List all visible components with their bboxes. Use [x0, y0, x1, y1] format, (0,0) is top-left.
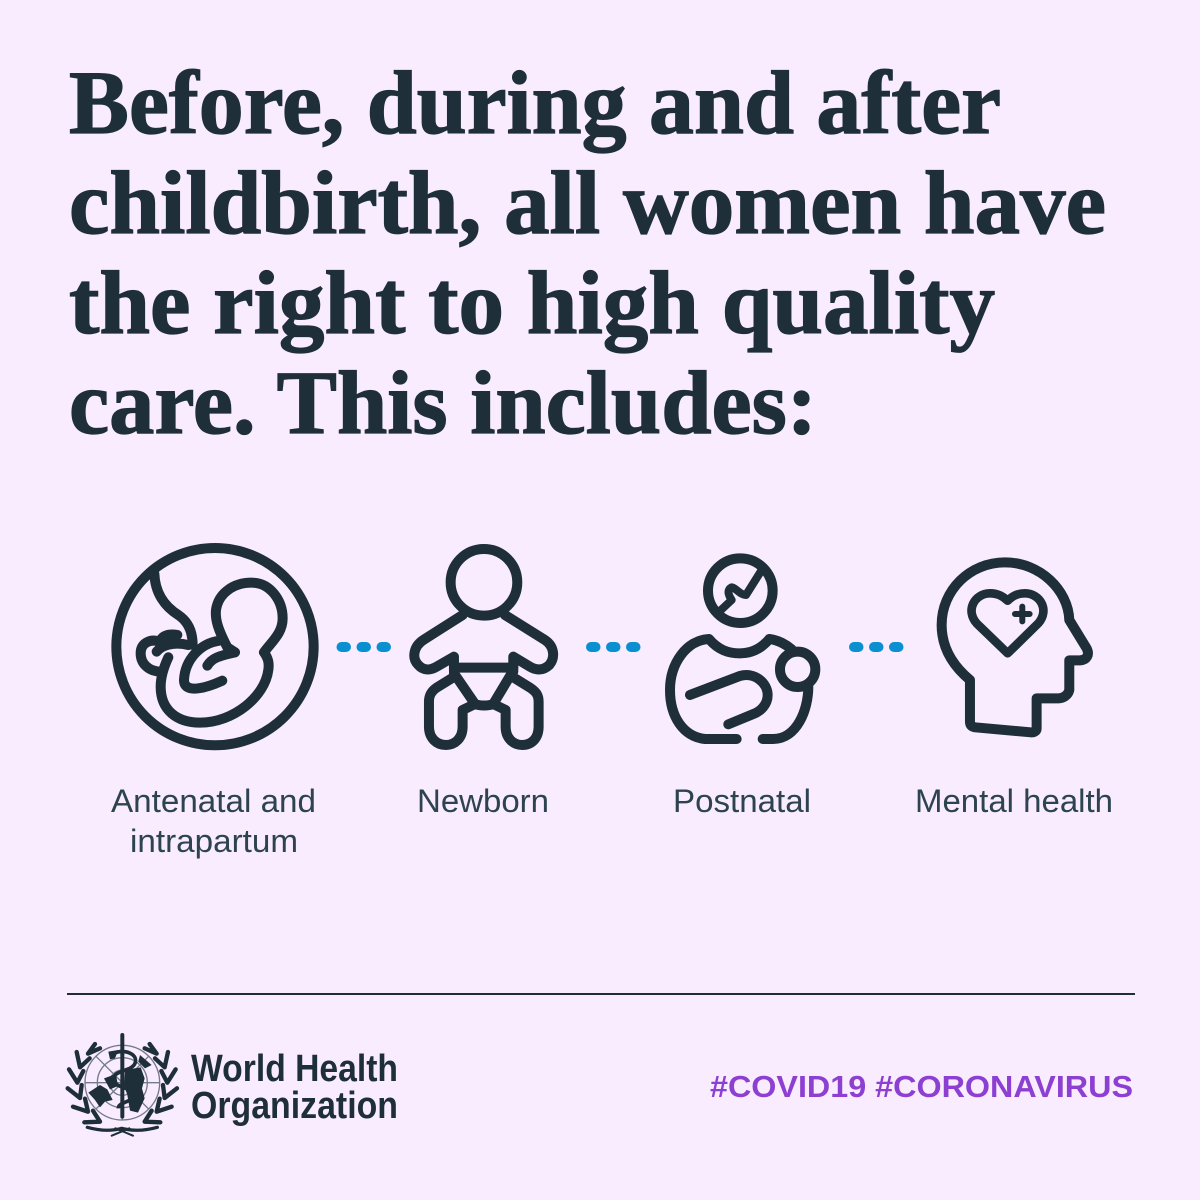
- title: care. This includes:: [69, 354, 817, 453]
- label: antenatal and intrapartum: intrapartum: [130, 823, 298, 859]
- label: antenatal and intrapartum: Antenatal and: [111, 783, 316, 819]
- title: Before, during and after: [69, 54, 1001, 153]
- title: childbirth, all women have: [69, 154, 1106, 253]
- icon: newborn baby: [414, 549, 553, 745]
- label: antenatal and intrapartum: [111, 783, 316, 859]
- connector dots 1: [336, 642, 391, 652]
- label: newborn: Newborn: [417, 783, 549, 819]
- title: [69, 54, 1106, 453]
- WHO wordmark: World Health: [191, 1048, 398, 1090]
- icon: head with heart: [942, 562, 1088, 732]
- connector dots 3: [849, 642, 904, 652]
- WHO wordmark: Organization: [191, 1085, 398, 1127]
- title: the right to high quality: [69, 254, 995, 353]
- label: postnatal: Postnatal: [673, 783, 811, 819]
- WHO wordmark: [191, 1048, 398, 1127]
- hashtags: #COVID19 #CORONAVIRUS: [710, 1069, 1133, 1104]
- icon: mother breastfeeding: [670, 558, 815, 739]
- connector dots 2: [586, 642, 640, 652]
- icon: fetus in womb: [116, 548, 314, 745]
- label: mental health: Mental health: [915, 783, 1113, 819]
- WHO emblem: [68, 1035, 177, 1136]
